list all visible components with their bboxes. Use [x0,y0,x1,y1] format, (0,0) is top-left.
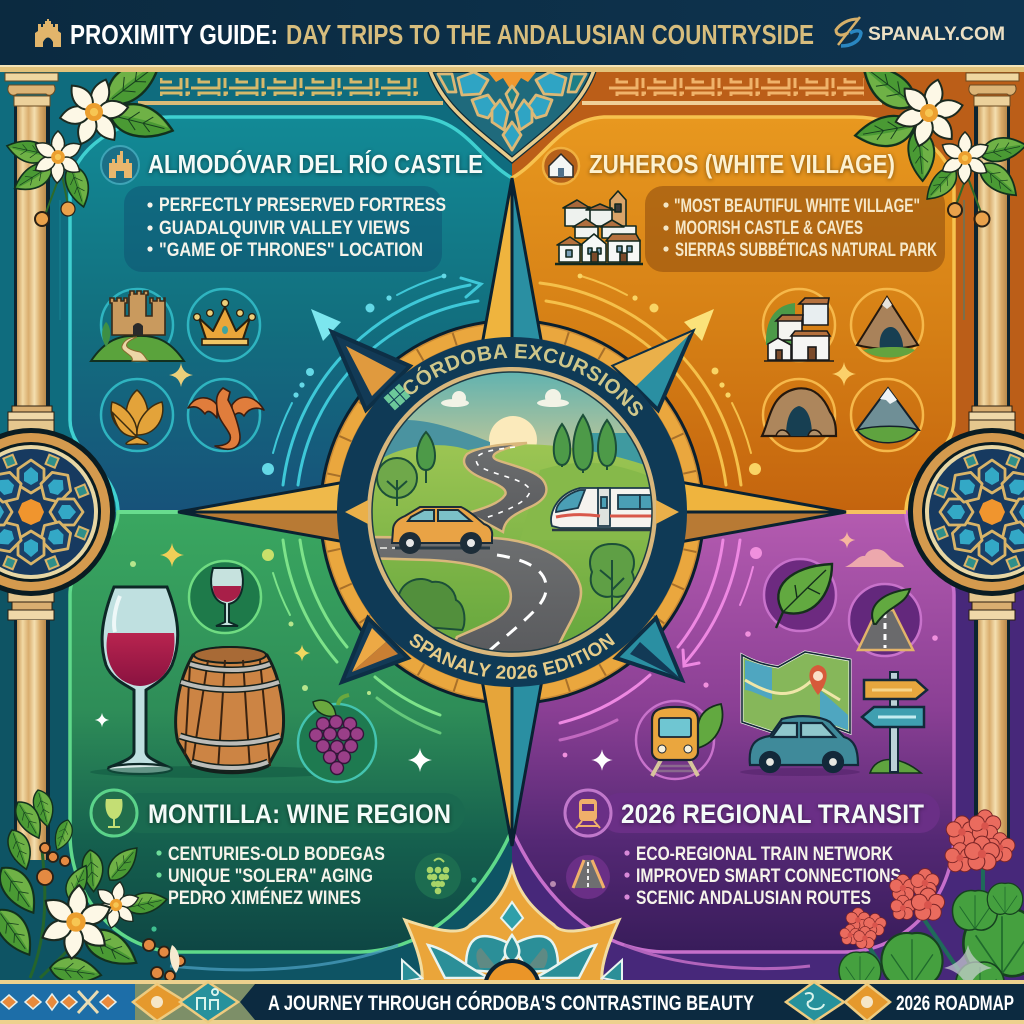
arcs: green journey lines [130,540,440,733]
header bar [0,0,1024,72]
icon: village circle [763,289,835,361]
text block: Almodóvar bullets: "GAME OF THRONES" LOCATION [159,239,423,261]
sparkles: green panel [95,543,432,772]
meander band: top left [138,78,443,105]
title [70,19,814,50]
icon: folded map [742,652,850,733]
text block: Transit heading: 2026 REGIONAL TRANSIT [621,799,924,829]
text block: Montilla heading [91,790,465,836]
text block: Montilla bullets: CENTURIES-OLD BODEGAS [168,843,385,865]
text block: Almodóvar bullets [124,186,446,272]
logo [836,17,1005,46]
icon: castle on hill [91,289,184,361]
text block: Almodóvar bullets: GUADALQUIVIR VALLEY VIEWS [159,217,410,239]
compass star: diagonal points [332,332,692,682]
panel: 2026 Regional Transit [512,512,954,952]
icon: train badge [565,790,611,836]
rings [337,337,687,687]
text block: Almodóvar bullets: PERFECTLY PRESERVED FORTRESS [159,194,446,216]
text block: Transit bullets: ECO-REGIONAL TRAIN NETWORK [636,843,893,865]
icon: wine barrel [90,647,340,778]
scene: countryside [372,372,652,652]
icon: golden leaf [101,379,173,451]
icon: grapes [298,695,376,782]
text block: Zuheros heading [543,148,895,184]
flowers: bottom right geraniums [838,810,1024,1004]
ring title: Córdoba Excursions: CÓRDOBA EXCURSIONS [403,344,643,416]
text block: Montilla heading: MONTILLA: WINE REGION [148,799,451,829]
panel: Montilla [70,512,512,952]
icon: house badge [543,148,579,184]
flowers: top right blossom cluster [853,55,1024,227]
icon: flower diamond [133,984,186,1021]
text block: Transit bullets: SCENIC ANDALUSIAN ROUTES [636,887,871,909]
ornament: bottom arabesque [402,868,622,1017]
icon: large wine glass [102,587,178,774]
icon: green leaf [764,559,836,631]
text block: Transit bullets: IMPROVED SMART CONNECTIONS [636,865,901,887]
panel: Almodóvar del Río Castle [70,117,512,512]
vehicle: train [551,488,662,530]
panel: Zuheros [512,117,954,512]
medallion: right [908,428,1024,596]
medallion outer ring [319,319,705,705]
text block: Zuheros bullets [645,186,945,272]
arcs: pink journey lines [560,540,938,757]
title: DAY TRIPS TO THE ANDALUSIAN COUNTRYSIDE [286,19,814,50]
sparkles: purple panel [591,532,855,771]
illustration: white village [555,191,643,264]
ring subtitle: Spanaly 2026 Edition: SPANALY 2026 EDITION [410,633,615,680]
divider lines [118,510,512,514]
icon: small wine glass [189,561,261,633]
flowers: top left blossom cluster [4,49,177,226]
text block: Almodóvar heading: ALMODÓVAR DEL RÍO CASTLE [148,149,483,179]
icon: star diamond [845,984,890,1021]
ornament: top arabesque [430,70,594,160]
compass star: long points [178,178,846,846]
watermark sparkle [944,945,992,992]
logo: SPANALY.COM [868,24,1005,45]
arcs: gold journey arrows [540,274,761,485]
icon: blue car [740,716,860,776]
icon: castle badge [101,146,139,184]
icon: map pin diamond [180,982,238,1022]
banner text: A JOURNEY THROUGH CÓRDOBA'S CONTRASTING BEAUTY [268,991,754,1015]
footer banner [0,980,1024,1024]
icon: cloud [845,549,904,567]
icon: route diamond [786,982,844,1022]
vehicle: car [392,507,492,553]
icon: dragon [188,379,264,451]
sparkle: orange panel [832,362,856,386]
sparkle: teal panel [169,363,193,387]
text block: Transit heading [565,790,940,836]
title: PROXIMITY GUIDE: [70,19,278,50]
icon: castle [35,19,61,47]
text block: Montilla bullets [156,843,385,909]
icon: cave [762,379,836,451]
icon: grape badge [415,853,461,899]
icon: map badge [383,383,411,411]
icon: snow peak [851,379,923,451]
road: winding upper [464,443,546,532]
text block: Zuheros bullets: MOORISH CASTLE & CAVES [675,217,863,239]
icon: white wine badge [91,790,137,836]
icon: crown [188,289,260,361]
text block: Transit bullets [624,843,901,909]
icon: eco train [636,701,722,779]
flowers: bottom left blossom branch [0,787,185,986]
central medallion [337,337,687,687]
icon: rocky mountain [851,289,923,361]
road: winding lower [374,536,582,652]
icon: road badge [566,855,610,899]
column: right [966,73,1019,840]
text block: Zuheros heading: ZUHEROS (WHITE VILLAGE) [589,149,895,179]
icon: leaf on road [849,584,921,656]
text block: Zuheros bullets: "MOST BEAUTIFUL WHITE VILLAGE" [674,195,920,217]
column: left [5,73,58,860]
arcs: teal journey arrows [262,274,481,485]
icon: signpost [862,672,927,773]
text block: Montilla bullets: PEDRO XIMÉNEZ WINES [168,886,361,909]
trees [377,415,634,630]
meander band: top right [582,78,882,105]
medallion: left [0,428,115,596]
text block: Montilla bullets: UNIQUE "SOLERA" AGING [168,865,373,887]
text block: Almodóvar heading [101,146,483,184]
